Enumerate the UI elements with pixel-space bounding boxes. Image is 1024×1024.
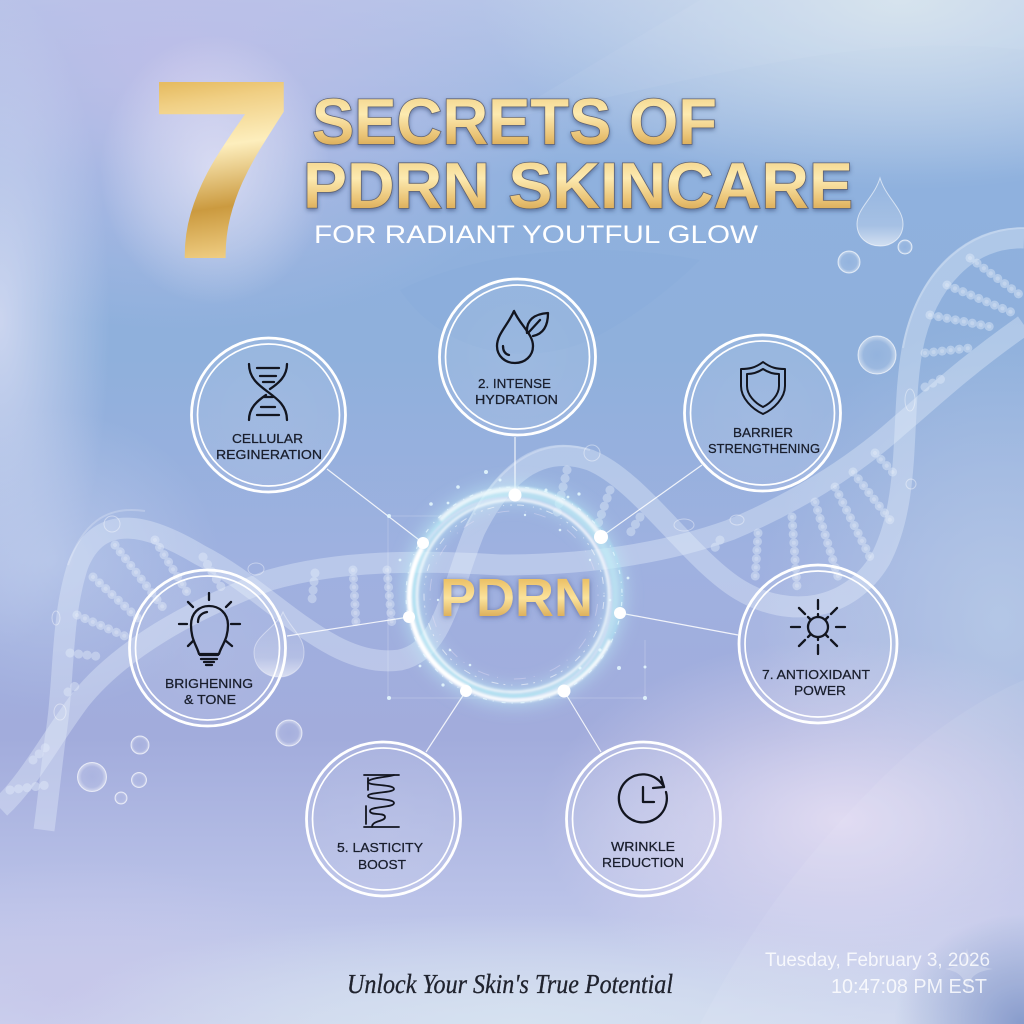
icon: clock with arrow [619, 774, 667, 822]
node: elasticity boost: 5. LASTICITY [337, 840, 423, 855]
node: antioxidant power [739, 565, 897, 723]
icon: shield [741, 362, 785, 414]
node: cellular regeneration [192, 338, 346, 492]
node: elasticity boost: BOOST [358, 857, 406, 872]
node: wrinkle reduction [566, 742, 720, 896]
connector lines [287, 437, 738, 752]
icon: drop and leaf [497, 311, 548, 363]
node: cellular regeneration: CELLULAR [232, 431, 303, 446]
water droplets and bubbles [78, 178, 912, 804]
node: intense hydration: HYDRATION [475, 392, 558, 407]
soft background swooshes [400, 0, 1024, 1024]
subtitle: FOR RADIANT YOUTFUL GLOW [314, 221, 758, 249]
node: wrinkle reduction: REDUCTION [602, 855, 684, 870]
faint frame lines [388, 516, 645, 698]
DNA double helix background [0, 228, 1024, 830]
PDRN centre label: PDRN [440, 568, 593, 628]
node: barrier strengthening: STRENGTHENING [708, 441, 820, 456]
node: brightening and tone: BRIGHENING [165, 676, 253, 691]
icon: dna [249, 364, 287, 420]
node: intense hydration [440, 279, 596, 435]
node: intense hydration: 2. INTENSE [478, 376, 551, 391]
icon: sun [791, 600, 845, 654]
node: barrier strengthening [684, 335, 840, 491]
node: barrier strengthening: BARRIER [733, 425, 793, 440]
date and time stamp [765, 950, 990, 998]
node: antioxidant power: POWER [794, 683, 846, 698]
date and time stamp: 10:47:08 PM EST [831, 976, 987, 998]
icon: light bulb [179, 593, 240, 665]
node: antioxidant power: 7. ANTIOXIDANT [762, 667, 870, 682]
node: wrinkle reduction: WRINKLE [611, 839, 675, 854]
node: elasticity boost [306, 742, 460, 896]
date and time stamp: Tuesday, February 3, 2026 [765, 950, 990, 971]
tagline: Unlock Your Skin's True Potential [347, 969, 673, 999]
large gold numeral 7: 7 [150, 30, 293, 309]
node: cellular regeneration: REGINERATION [216, 447, 322, 462]
glow behind numeral 7 [100, 35, 330, 305]
icon: spring [364, 775, 399, 827]
node: brightening and tone: & TONE [184, 692, 236, 707]
sparkle star [945, 948, 993, 993]
title: PDRN SKINCARE [303, 149, 853, 222]
title: SECRETS OF [312, 85, 717, 158]
node: brightening and tone [130, 570, 286, 726]
title [303, 85, 853, 222]
central glowing ring [387, 470, 647, 703]
